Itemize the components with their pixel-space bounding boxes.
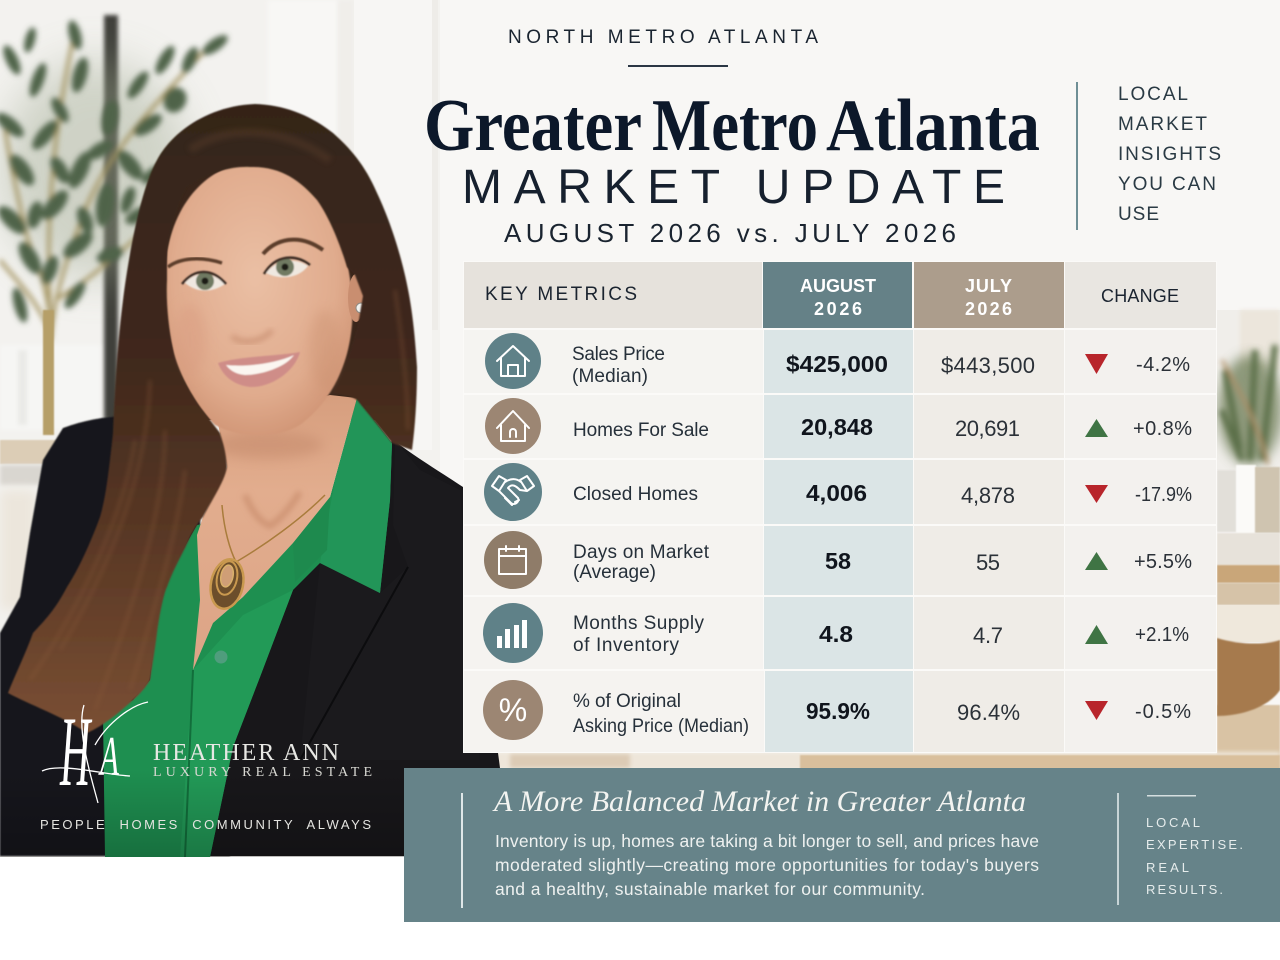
banner body: Inventory is up, homes are taking a bit longer to sell, and prices have	[495, 831, 1039, 851]
hair	[8, 104, 417, 733]
row: closed homes: -17.9%	[1135, 484, 1192, 506]
row: homes for sale: +0.8%	[1133, 418, 1192, 440]
row: closed homes: 4,878	[961, 483, 1015, 508]
icon: percent: %	[499, 692, 527, 728]
white base below portrait and banner	[0, 857, 405, 960]
row: closed homes	[464, 460, 1216, 524]
banner body: moderated slightly—creating more opportunities for today's buyers	[495, 855, 1039, 875]
side note: MARKET	[1118, 114, 1207, 135]
row: months supply: 4.8	[819, 621, 853, 647]
row: months supply	[464, 597, 1216, 669]
row: sales price: Sales Price	[572, 344, 665, 365]
title: Greater	[424, 85, 642, 167]
table header: AUGUST	[800, 276, 876, 296]
row: percent of asking: % of Original	[573, 691, 681, 712]
arrow: down	[1085, 485, 1108, 503]
banner heading: A More Balanced Market in Greater Atlanta	[492, 785, 1026, 818]
side note	[1076, 82, 1221, 230]
row: homes for sale: 20,691	[955, 416, 1020, 441]
arrow: up	[1085, 419, 1108, 437]
necklace	[206, 495, 325, 612]
title	[424, 85, 1040, 167]
ear	[348, 274, 364, 322]
icon: handshake	[484, 463, 542, 521]
row: months supply: Months Supply	[573, 613, 704, 634]
row: days on market: +5.5%	[1134, 551, 1192, 573]
row: days on market: 58	[825, 548, 851, 574]
row: days on market: Days on Market	[573, 542, 710, 563]
table header: KEY METRICS	[485, 284, 637, 305]
side note: LOCAL	[1118, 84, 1188, 105]
row: percent of asking: Asking Price (Median)	[573, 716, 749, 737]
row: months supply: 4.7	[973, 623, 1003, 648]
hair back	[140, 110, 400, 420]
face	[165, 162, 353, 436]
row: percent of asking	[464, 671, 1216, 752]
title: Atlanta	[826, 85, 1040, 167]
banner side note	[1146, 795, 1243, 897]
table header: 2026	[965, 299, 1012, 319]
row: sales price	[464, 330, 1216, 393]
row: days on market: 55	[976, 550, 1000, 575]
title: Metro	[652, 85, 818, 167]
brand subtitle: LUXURY REAL ESTATE	[153, 765, 372, 780]
row: homes for sale: Homes For Sale	[573, 420, 709, 441]
monogram	[42, 696, 148, 807]
row: closed homes: Closed Homes	[573, 484, 698, 505]
icon: calendar	[484, 531, 542, 589]
banner side note: REAL	[1146, 860, 1189, 875]
arrow: up	[1085, 625, 1108, 644]
banner side note: RESULTS.	[1146, 882, 1223, 897]
smile	[218, 352, 300, 387]
table header: JULY	[965, 276, 1012, 296]
eyes	[182, 258, 310, 291]
row: sales price: (Median)	[572, 366, 648, 387]
arrow: up	[1085, 552, 1108, 570]
banner body: and a healthy, sustainable market for our community.	[495, 879, 925, 899]
icon: house	[485, 333, 541, 389]
row: months supply: +2.1%	[1135, 624, 1189, 646]
blouse button	[214, 650, 228, 664]
banner side note: LOCAL	[1146, 815, 1200, 830]
row: sales price: $425,000	[786, 351, 888, 377]
row: sales price: -4.2%	[1136, 354, 1190, 376]
portrait of agent	[0, 104, 500, 857]
monogram: H	[59, 696, 92, 807]
icon: bar chart	[483, 603, 543, 663]
date comparison: AUGUST 2026 vs. JULY 2026	[504, 218, 956, 248]
row: percent of asking: 95.9%	[806, 698, 870, 724]
arrow: down	[1085, 701, 1108, 720]
row: days on market: (Average)	[573, 562, 656, 583]
brand name: HEATHER ANN	[153, 740, 339, 766]
icon: percent	[483, 680, 543, 740]
arrow: down	[1085, 354, 1108, 374]
banner side note: EXPERTISE.	[1146, 837, 1243, 852]
side note: USE	[1118, 204, 1159, 225]
nose	[232, 330, 272, 342]
neck and chest	[193, 395, 357, 670]
row: percent of asking: 96.4%	[957, 700, 1020, 725]
row: months supply: of Inventory	[573, 635, 680, 656]
brows	[168, 259, 222, 267]
row: days on market	[464, 526, 1216, 595]
jacket	[0, 416, 500, 856]
monogram: A	[98, 725, 119, 787]
tagline: PEOPLE HOMES COMMUNITY ALWAYS	[40, 817, 371, 832]
olive plant	[0, 19, 231, 340]
table header: 2026	[814, 299, 862, 319]
row: percent of asking: -0.5%	[1135, 701, 1191, 723]
row: homes for sale: 20,848	[801, 414, 873, 440]
side note: INSIGHTS	[1118, 144, 1221, 165]
side note: YOU CAN	[1118, 174, 1216, 195]
icon: house for sale	[485, 398, 541, 454]
panel: key metrics table	[463, 261, 1217, 753]
table header	[464, 262, 1216, 328]
right side room	[1217, 310, 1280, 470]
bottom shade	[0, 770, 404, 857]
blouse	[103, 398, 392, 857]
logo: Heather Ann Luxury Real Estate	[40, 696, 372, 832]
row: sales price: $443,500	[941, 353, 1035, 378]
earring	[356, 303, 366, 313]
row: closed homes: 4,006	[806, 480, 867, 506]
subtitle: MARKET UPDATE	[462, 161, 1005, 214]
row: homes for sale	[464, 395, 1216, 458]
table header: CHANGE	[1101, 286, 1179, 306]
banner body	[495, 831, 1039, 899]
panel: summary banner	[404, 768, 1280, 922]
eyebrow heading: NORTH METRO ATLANTA	[508, 27, 818, 48]
